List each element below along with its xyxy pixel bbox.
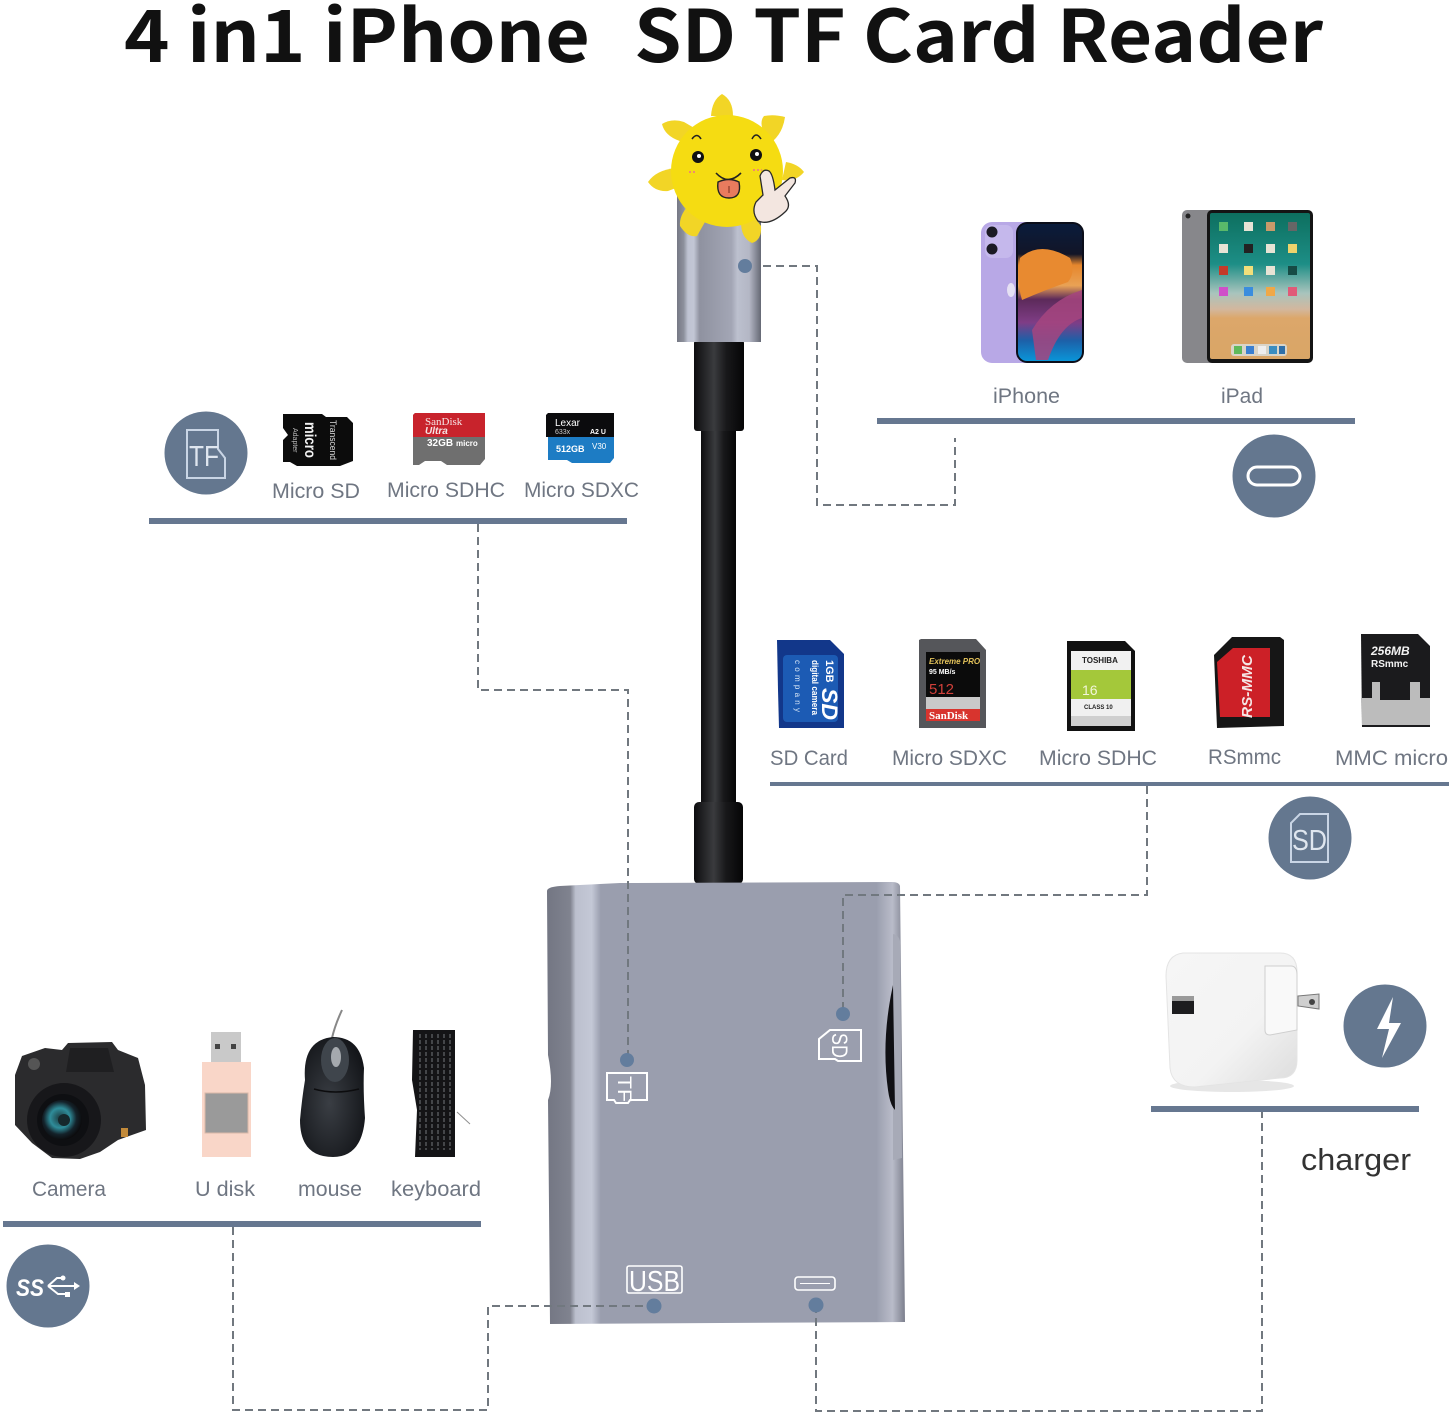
dashed connector lines [233, 266, 1262, 1411]
label: Micro SDHC: Micro SDHC [387, 479, 505, 502]
card: SD Card: 1GB [823, 660, 835, 683]
icon: sun mascot [648, 94, 804, 243]
label: keyboard: keyboard [391, 1178, 481, 1201]
label: Micro SDHC: Micro SDHC [1039, 747, 1157, 770]
card: Micro SD: Transcend [328, 420, 338, 460]
panel: USB devices [3, 1010, 481, 1328]
icon: USB mark on reader: USB [629, 1266, 680, 1298]
card: SD Card: digital camera [810, 660, 820, 716]
card: Micro SD: micro [301, 422, 318, 458]
label: RSmmc: RSmmc [1208, 746, 1281, 769]
card: MMC micro: 256MB [1370, 644, 1410, 658]
label: iPad: iPad [1221, 385, 1263, 408]
panel: Apple devices [877, 210, 1355, 518]
card: Toshiba: CLASS 10 [1084, 705, 1113, 711]
card: SanDisk Ultra [413, 413, 485, 465]
icon: type-C badge [1232, 434, 1316, 518]
icon: TF mark on reader: TF [613, 1076, 634, 1102]
icon: SD badge: SD [1292, 825, 1327, 857]
card: Micro SD [283, 414, 353, 466]
card: RS-MMC: RS-MMC [1239, 654, 1256, 718]
card: Toshiba: TOSHIBA [1082, 656, 1118, 665]
icon: TF mark on reader [607, 1073, 647, 1103]
icon: iPad [1182, 210, 1313, 363]
card: Lexar: A2 U [590, 429, 606, 436]
label: Camera: Camera [32, 1178, 106, 1201]
icon: power adapter [1166, 953, 1319, 1092]
card: Lexar: 512GB [556, 444, 585, 454]
product: lightning connector and cable [677, 190, 761, 884]
card: SanDisk Ultra: 32GB [427, 438, 453, 449]
icon: SD badge [1268, 796, 1352, 880]
label: MMC micro: MMC micro [1335, 747, 1448, 770]
label: Micro SD: Micro SD [272, 480, 360, 503]
label: charger: charger [1301, 1142, 1411, 1177]
title [124, 0, 1324, 83]
label: iPhone: iPhone [993, 385, 1060, 408]
icon: camera [15, 1042, 146, 1159]
card: SanDisk Extreme Pro [919, 639, 986, 728]
card: SD Card [777, 640, 844, 728]
card: Micro SD: Adapter [291, 428, 298, 453]
icon: keyboard [412, 1030, 470, 1157]
connector dots [620, 259, 850, 1314]
icon: mouse [300, 1010, 365, 1157]
divider bar [770, 782, 1449, 786]
divider bar [149, 518, 627, 524]
card: Lexar: V30 [592, 442, 607, 451]
card: SanDisk Extreme Pro: Extreme PRO [929, 657, 981, 666]
card: RS-MMC [1214, 637, 1284, 728]
icon: SuperSpeed USB badge [6, 1244, 90, 1328]
label: Micro SDXC: Micro SDXC [892, 747, 1007, 770]
icon: SuperSpeed USB badge: SS [16, 1275, 44, 1302]
icon: SD mark on reader [819, 1030, 861, 1061]
divider bar [877, 418, 1355, 424]
divider bar [1151, 1106, 1419, 1112]
product: card reader body [547, 882, 905, 1324]
panel: TF cards [149, 412, 639, 524]
panel: SD cards [770, 634, 1449, 880]
icon: TF badge [164, 412, 248, 494]
card: SanDisk Extreme Pro: 95 MB/s [929, 669, 956, 676]
card: SanDisk Extreme Pro: SanDisk [929, 710, 969, 722]
icon: U disk [202, 1032, 251, 1157]
label: SD Card: SD Card [770, 747, 848, 770]
card: MMC micro: RSmmc [1371, 659, 1409, 670]
card: Toshiba: 16 [1082, 682, 1098, 698]
card: SD Card: company [793, 660, 802, 712]
card: Lexar: 633x [555, 429, 571, 436]
card: Lexar [546, 413, 614, 463]
card: SD Card: SD [817, 688, 842, 720]
card: SanDisk Ultra: Ultra [425, 426, 448, 437]
icon: SD mark on reader: SD [827, 1033, 852, 1058]
card: MMC micro [1361, 634, 1430, 727]
panel: charger [1151, 953, 1426, 1177]
card: Toshiba [1067, 641, 1135, 731]
icon: TF badge: TF [189, 441, 219, 473]
card: SanDisk Extreme Pro: 512 [929, 681, 954, 698]
card: Lexar: Lexar [555, 418, 581, 429]
label: mouse: mouse [298, 1178, 362, 1201]
divider bar [3, 1221, 481, 1227]
label: Micro SDXC: Micro SDXC [524, 479, 639, 502]
label: U disk: U disk [195, 1178, 255, 1201]
card: SanDisk Ultra: micro [456, 439, 478, 448]
icon: bolt badge [1344, 984, 1426, 1068]
icon: iPhone [981, 222, 1084, 363]
icon: type-C mark on reader [795, 1277, 835, 1290]
card: SanDisk Ultra: SanDisk [425, 416, 463, 428]
